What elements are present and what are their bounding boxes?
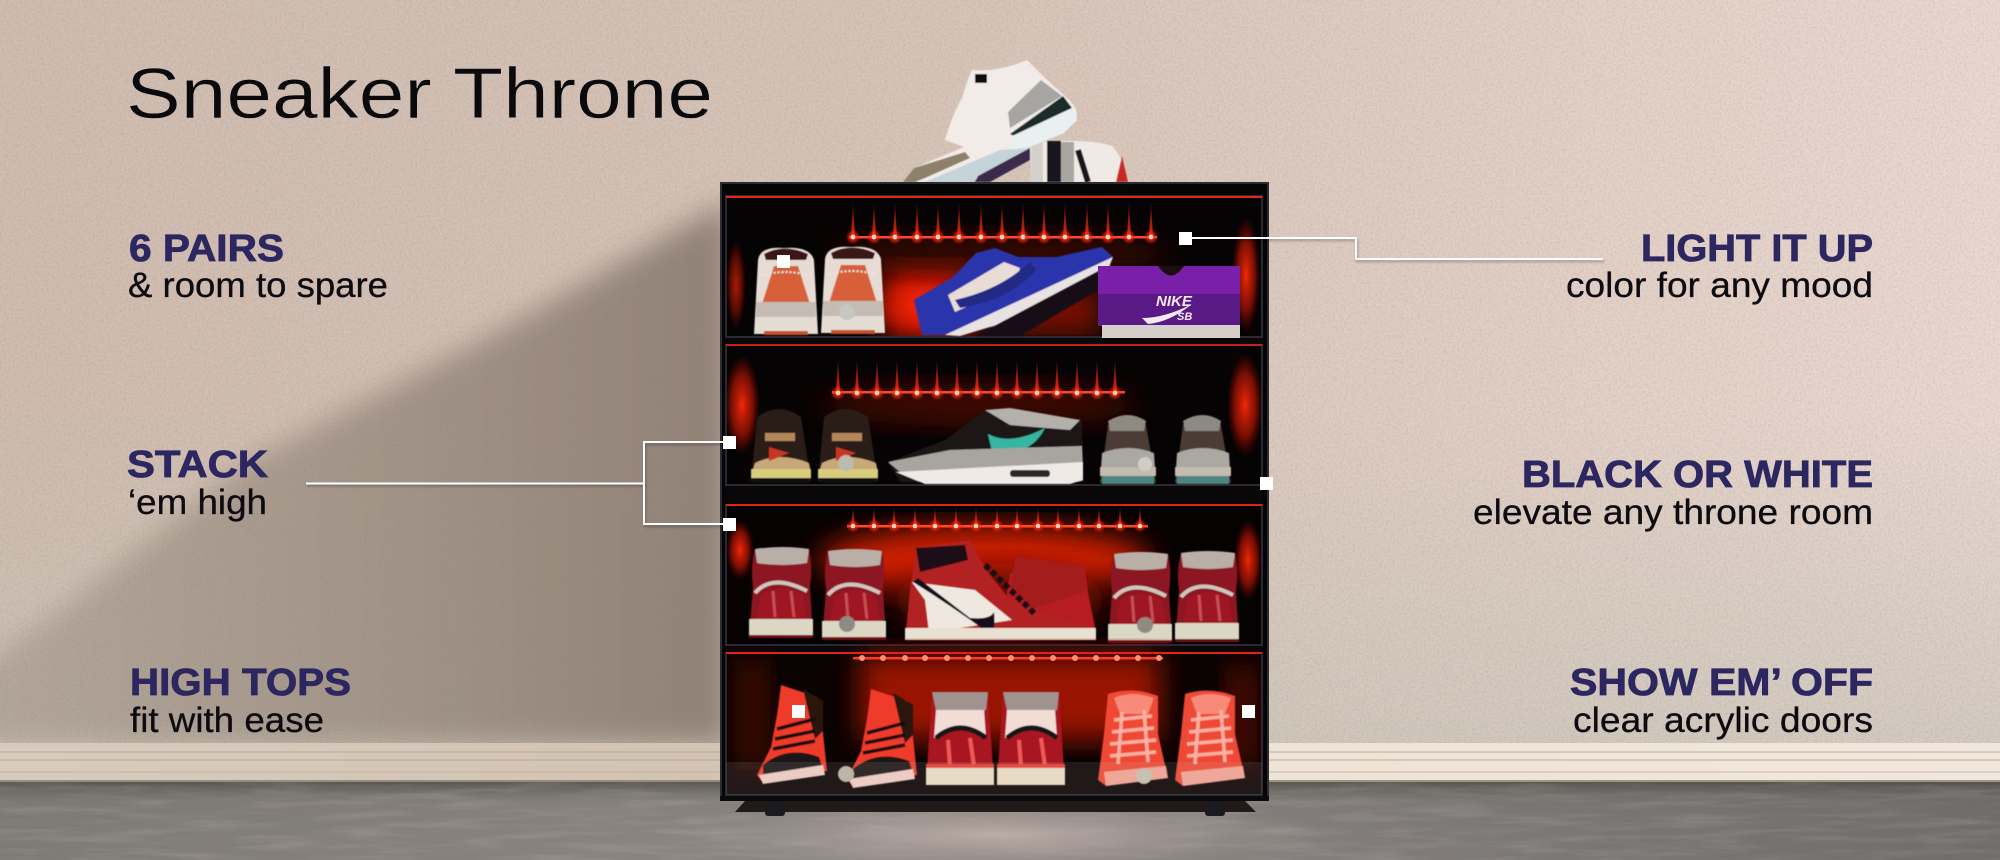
shelf 1 [726,196,1262,345]
callout: show em off: SHOW EM’ OFF [1570,662,1873,704]
callout: stack: ‘em high [128,483,267,522]
shoes: coral high tops [1098,690,1245,786]
shoe: dark rear pairs [751,409,878,483]
shoe: small white shoe lying on cabinet [1030,141,1128,182]
shoe: cement running shoe with teal swoosh [888,408,1083,484]
callout: high tops: fit with ease [130,701,324,740]
shelf 2 [724,344,1263,505]
shoe: orange high tops rear view [754,247,885,335]
cabinet feet and under shadow [735,801,1256,816]
callout: high tops: HIGH TOPS [130,662,351,704]
callout: light it up [1179,228,1873,305]
shoe: grey and brown rear pairs [1100,415,1231,484]
callout: light it up: color for any mood [1566,266,1873,305]
LED strip 1 [848,201,1157,242]
shoe: red heels left pair [749,547,886,640]
cabinet body [720,182,1269,801]
shelf 1 interior glow [726,196,1262,341]
callout: 6 pairs: 6 PAIRS [129,228,284,270]
title: Sneaker Throne [126,55,713,134]
purple shoe box: NIKE [1156,293,1193,310]
shoe: blue low top [914,247,1113,336]
LED strip 4 [853,655,1163,661]
shoe: white and cement high top [903,60,1077,182]
floor [0,782,2000,860]
cabinet [720,182,1269,816]
callout: show em off: clear acrylic doors [1573,701,1873,740]
callout: black or white [1260,454,1873,532]
callout: stack [127,436,736,531]
shelf 4 [726,652,1262,795]
shoes: dark red high tops [757,685,917,788]
wall shadow cast by cabinet [0,200,730,745]
LED strip 2 [832,357,1125,398]
shelf 3 [726,504,1262,653]
purple shoe box [1098,266,1240,338]
baseboard [0,743,2000,782]
callout: 6 pairs [128,228,790,305]
callout: show em off [1242,662,1873,740]
callout: high tops [130,662,805,740]
callout: stack: STACK [127,444,269,486]
acrylic floor reflection [726,762,1262,795]
top shoes on cabinet [903,60,1128,182]
shoe: red white black high top pair [905,540,1096,640]
shelf 4 interior glow [726,652,1262,795]
shoes: red heels with grey collar [926,692,1065,785]
callout: light it up: LIGHT IT UP [1641,228,1873,270]
shelf 2 interior glow [724,344,1263,485]
callout: black or white: BLACK OR WHITE [1522,454,1873,496]
purple shoe box: SB [1177,311,1192,323]
LED strip 3 [847,506,1148,531]
callout: black or white: elevate any throne room [1473,493,1873,532]
callout: 6 pairs: & room to spare [128,266,388,305]
shelf 3 interior glow [726,504,1262,645]
shoe: red heels right pair [1108,551,1239,643]
